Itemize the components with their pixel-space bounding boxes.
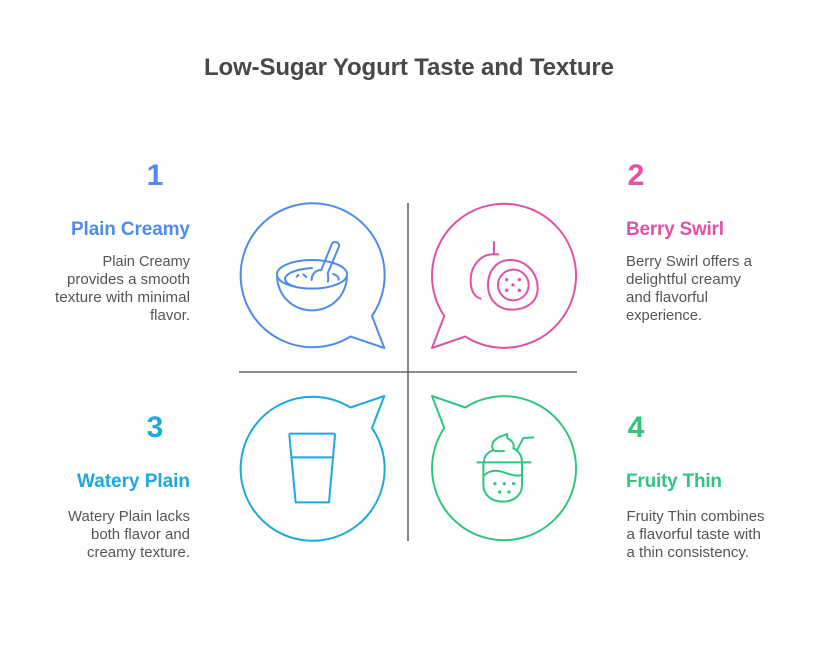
- icon: bowl with spoon: [277, 242, 347, 310]
- description: plain creamy: flavor.: [150, 307, 190, 324]
- description: fruity thin: a thin consistency.: [626, 544, 749, 561]
- speech bubble: plain creamy: [241, 203, 385, 348]
- description: fruity thin: Fruity Thin combines: [626, 508, 764, 525]
- description: berry swirl: and flavorful: [626, 289, 708, 306]
- speech bubble: watery plain: [241, 396, 385, 541]
- quadrant axes: [239, 203, 577, 541]
- speech bubble: berry swirl: [432, 204, 576, 348]
- icon: fruit smoothie cup: [477, 434, 533, 502]
- number 1: 1: [147, 159, 163, 192]
- description: berry swirl: delightful creamy: [626, 271, 742, 288]
- panel: plain creamy: [55, 159, 385, 348]
- icon: berry: [471, 242, 538, 310]
- description: watery plain: creamy texture.: [87, 544, 190, 561]
- description: berry swirl: Berry Swirl offers a: [626, 253, 753, 270]
- description: plain creamy: Plain Creamy: [102, 253, 190, 270]
- description: berry swirl: [626, 253, 753, 324]
- description: fruity thin: [626, 508, 764, 561]
- description: watery plain: both flavor and: [91, 526, 190, 543]
- panel: berry swirl: [432, 159, 753, 348]
- description: berry swirl: experience.: [626, 307, 702, 324]
- number 3: 3: [147, 411, 163, 444]
- panel: watery plain: [68, 396, 385, 561]
- description: fruity thin: a flavorful taste with: [626, 526, 761, 543]
- icon: glass of water: [289, 434, 335, 502]
- description: plain creamy: provides a smooth: [67, 271, 190, 288]
- heading: fruity thin: Fruity Thin: [626, 471, 722, 492]
- speech bubble: fruity thin: [432, 396, 576, 540]
- title: Low-Sugar Yogurt Taste and Texture: [204, 54, 614, 81]
- description: watery plain: Watery Plain lacks: [68, 508, 190, 525]
- heading: plain creamy: Plain Creamy: [71, 219, 190, 240]
- panel: fruity thin: [432, 396, 764, 561]
- heading: watery plain: Watery Plain: [77, 471, 190, 492]
- description: plain creamy: texture with minimal: [55, 289, 190, 306]
- number 2: 2: [628, 159, 644, 192]
- description: watery plain: [68, 508, 190, 561]
- heading: berry swirl: Berry Swirl: [626, 219, 724, 240]
- number 4: 4: [628, 411, 645, 444]
- description: plain creamy: [55, 253, 190, 324]
